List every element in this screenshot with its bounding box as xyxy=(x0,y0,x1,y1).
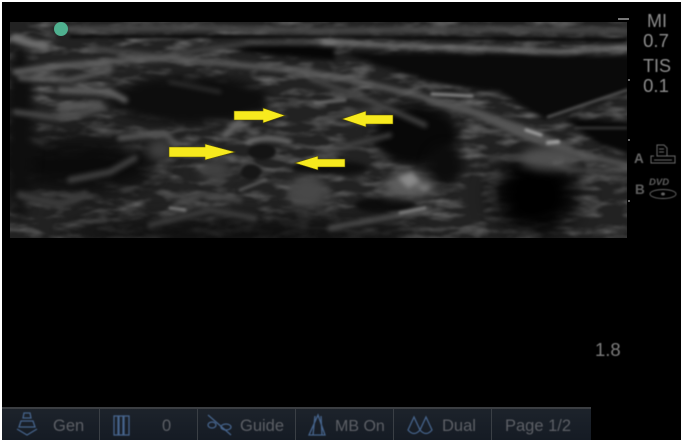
toolbar dividers xyxy=(99,409,492,440)
label A: A xyxy=(634,151,644,166)
orientation marker dot xyxy=(54,22,68,36)
icon: DVD xyxy=(649,177,676,198)
readout: MI: MI xyxy=(647,11,667,31)
readout: MI value: 0.7 xyxy=(643,30,669,51)
arrow: lower left-pointing xyxy=(295,156,345,170)
readouts xyxy=(643,11,671,96)
toolbar button: Page 1/2: Page 1/2 xyxy=(505,417,571,435)
toolbar button: Gen: Gen xyxy=(53,417,84,435)
dark shadow regions xyxy=(0,35,640,244)
arrow: upper right-pointing xyxy=(234,108,285,123)
toolbar button: column count xyxy=(114,416,171,435)
toolbar button: Gen xyxy=(17,413,84,435)
icon: DVD: DVD xyxy=(649,177,669,188)
bright lumps xyxy=(147,140,580,208)
toolbar button: Guide: Guide xyxy=(240,417,284,435)
arrow: left right-pointing xyxy=(169,144,235,160)
toolbar button: Guide xyxy=(208,415,284,435)
toolbar button: column count: 0 xyxy=(162,417,171,435)
depth value: 1.8 xyxy=(595,339,621,360)
scan image xyxy=(0,20,640,244)
readout: TIS: TIS xyxy=(643,56,671,76)
toolbar button: Dual: Dual xyxy=(442,417,476,435)
toolbar button: MB On xyxy=(309,415,385,435)
toolbar button: MB On: MB On xyxy=(335,418,385,435)
icon: printer xyxy=(651,145,675,163)
bottom toolbar xyxy=(2,407,591,440)
speckle texture xyxy=(8,20,629,240)
arrow: upper left-pointing xyxy=(342,111,393,127)
depth scale ticks xyxy=(628,79,630,202)
depth scale top tick xyxy=(618,18,629,20)
tissue base xyxy=(8,20,629,240)
readout: TIS value: 0.1 xyxy=(643,75,669,96)
toolbar button: Dual xyxy=(408,417,476,435)
bright fascia and tissue streaks xyxy=(15,28,627,228)
yellow arrows xyxy=(169,108,393,170)
label B: B xyxy=(635,182,645,197)
